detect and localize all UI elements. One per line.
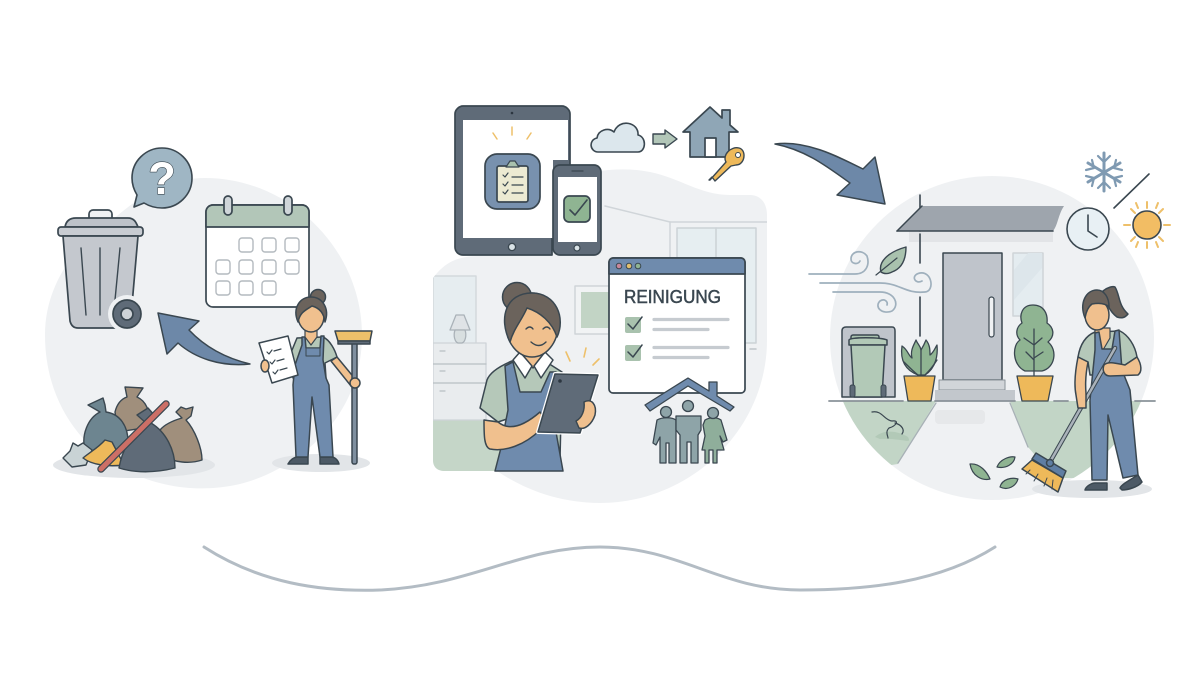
icon: smartphone with check [553,165,601,255]
icon: bin enclosure with green bin [842,327,895,397]
panel: digital planning [433,106,767,503]
icon: pile of garbage bags [53,387,215,478]
lawn and path [829,401,1142,478]
background circle right [830,176,1154,500]
room interior [433,206,767,471]
icon: clock [1067,208,1109,250]
figure: woman sweeping [1022,287,1152,498]
background room blob [433,169,767,503]
icon: snowflake [1086,153,1122,191]
figure: smiling woman with tablet [480,282,599,471]
icon: question speech bubble: ? [148,153,176,204]
panel: problem with waste bin and bags [45,148,372,488]
heading: REINIGUNG: REINIGUNG [624,287,721,307]
icon: house with key [683,107,744,181]
decorative wave line [204,547,995,590]
browser window: Reinigung checklist [609,258,745,393]
arrow: back to bin [158,313,250,365]
slash divider [1114,174,1149,208]
icon: potted tree [1015,305,1054,401]
arrow: cloud to house [653,130,677,148]
figure: worker with checklist and broom [259,290,372,472]
panel: clean entrance [809,153,1170,500]
ground line [829,400,1155,402]
icon: waste bin [58,210,146,333]
icon: question speech bubble [132,148,192,208]
arrow: to result [775,143,885,204]
icon: wind swirls with leaf [809,247,931,312]
icon: sun [1124,202,1170,248]
background blob left [45,178,362,488]
illustration canvas [45,105,1171,592]
icon: tablet with clipboard [455,106,570,255]
house entrance with awning and door [897,195,1064,401]
icon: family under roof [645,378,734,463]
icon: cloud [591,123,644,152]
icon: fallen leaves [970,457,1018,488]
icon: calendar [206,196,309,307]
icon: potted agave plant [902,340,937,401]
